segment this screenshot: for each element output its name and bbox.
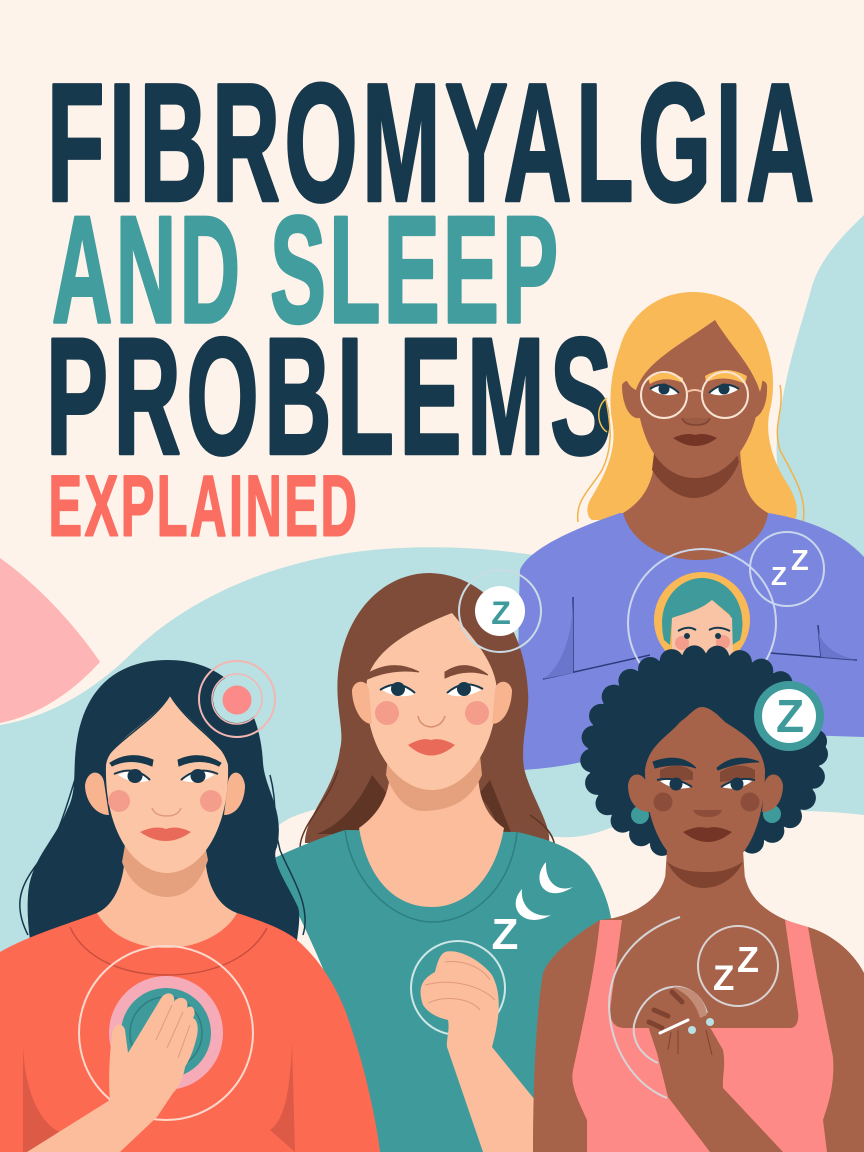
teal shirt [270, 830, 612, 1152]
eyes and glasses [641, 370, 748, 418]
zzz icon in circle: Z [771, 561, 787, 591]
face [366, 613, 497, 790]
neck and chest [97, 850, 237, 948]
coral shirt [0, 913, 380, 1152]
sleeve folds [23, 1043, 295, 1152]
zzz icon in circle: Z [791, 545, 809, 577]
z icon in circle [459, 570, 541, 652]
title line: Explained: EXPLAINED [48, 457, 357, 554]
hair strand lines [108, 695, 226, 755]
sleeping head in circle [628, 549, 776, 697]
z icon in circle: Z [491, 595, 511, 631]
swirl lines [609, 917, 707, 1098]
blonde hair [587, 292, 797, 520]
neck shadow [122, 845, 208, 897]
person: woman with blonde hair and glasses [518, 292, 864, 770]
neck shadow [667, 862, 743, 888]
lips [673, 434, 717, 446]
blue shirt [518, 513, 864, 770]
title line: Problems: PROBLEMS [46, 303, 612, 489]
navy hair [28, 660, 299, 940]
zzz icon in circle: Z [737, 939, 759, 980]
title [46, 49, 814, 554]
person: woman with afro and pink top [533, 653, 864, 1152]
neck [623, 450, 768, 560]
facial features [108, 756, 222, 841]
title line: And Sleep: AND SLEEP [52, 184, 558, 354]
hair outline strands [20, 770, 305, 935]
finger lines [156, 1005, 190, 1058]
pale highlight over knuckle [672, 987, 707, 1018]
facial features [365, 666, 489, 756]
zzz icon in circle: Z [713, 959, 734, 998]
pain signal icon [199, 661, 275, 737]
finger lines [425, 962, 495, 1010]
hand and arm [421, 951, 540, 1152]
facial features [653, 758, 760, 842]
hand and arm [647, 990, 783, 1152]
dark hair shading [316, 775, 512, 835]
afro hair [588, 653, 820, 855]
collar line [345, 830, 517, 922]
z badge [754, 681, 824, 751]
shirt fold marks [543, 597, 857, 679]
neck shadow [652, 445, 739, 498]
zzz icon in circle [750, 532, 824, 606]
zzz icon in circle [698, 926, 778, 1006]
face [106, 695, 228, 873]
nose [682, 418, 710, 425]
collar line [70, 927, 267, 975]
moon and z icons [492, 862, 573, 959]
moon and z icons: Z [492, 910, 518, 959]
neck and chest [359, 770, 504, 907]
fingers [668, 1030, 712, 1055]
circle ring [411, 941, 505, 1035]
torso [533, 877, 864, 1152]
earrings [631, 805, 781, 824]
person: woman with navy hair and coral shirt [0, 660, 380, 1152]
ring and nails [660, 1020, 688, 1033]
brown hair [305, 573, 549, 843]
face [645, 707, 765, 872]
hair outline strands [300, 770, 555, 850]
neck shadow [386, 755, 482, 811]
chest target rings [79, 946, 253, 1120]
hair fringe [624, 297, 763, 392]
title line: Fibromyalgia: FIBROMYALGIA [47, 49, 814, 236]
face [636, 318, 760, 478]
hand and arm [27, 993, 198, 1152]
z badge: Z [776, 690, 804, 742]
person: woman with brown hair and teal shirt [270, 570, 612, 1152]
neck [665, 850, 745, 880]
fingertips [649, 992, 682, 1028]
pink top [572, 920, 833, 1152]
